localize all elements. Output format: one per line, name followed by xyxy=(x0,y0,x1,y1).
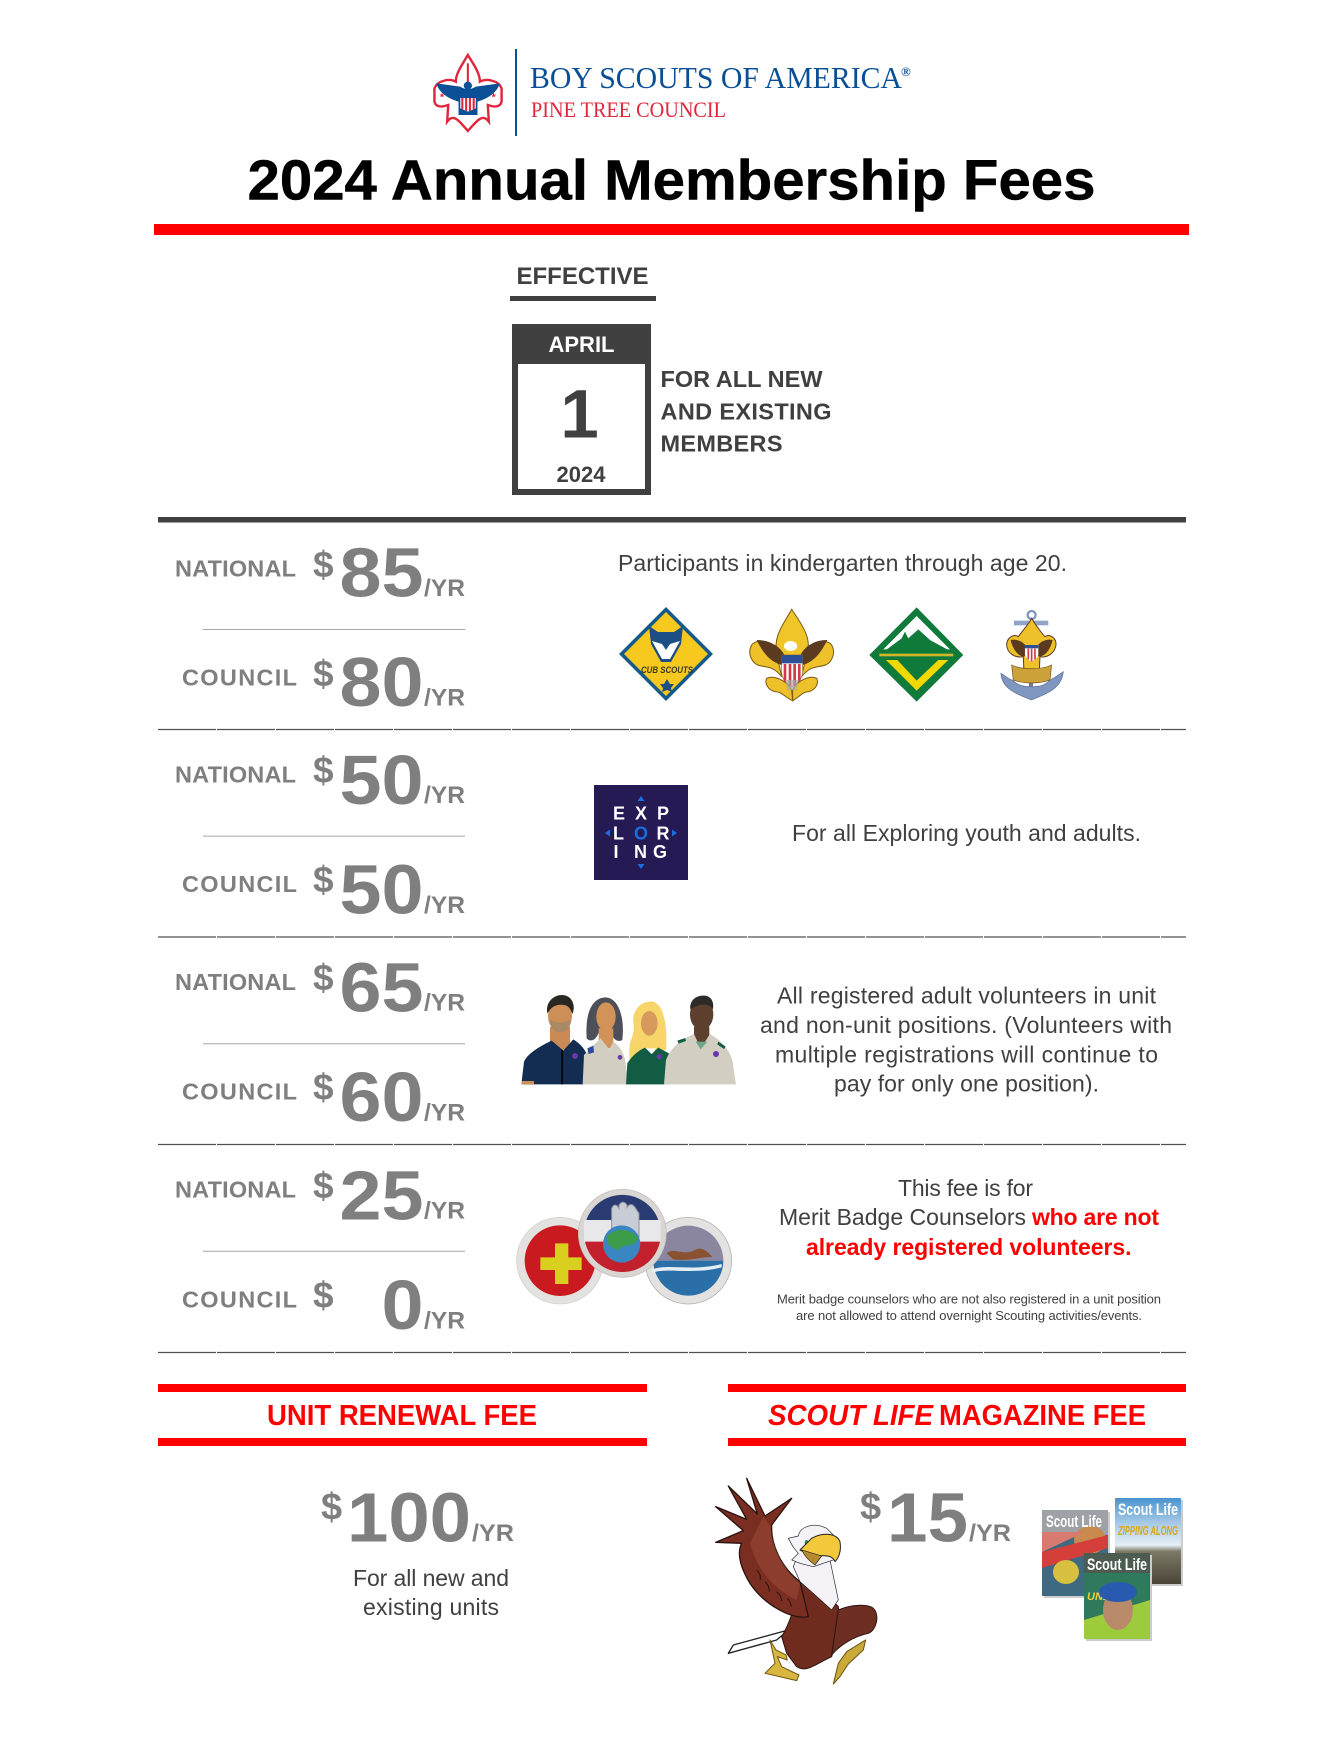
row 1 description: Participants in kindergarten through age 20. xyxy=(618,550,1067,576)
registered mark: ® xyxy=(901,64,911,79)
row 4 description: are not allowed to attend overnight Scouting activities/events. xyxy=(796,1308,1142,1323)
icon: Exploring logo: E xyxy=(613,804,625,824)
applies to text: FOR ALL NEW xyxy=(660,366,823,392)
row 3 fees: national 65, council 60: NATIONAL xyxy=(175,969,296,995)
title red rule xyxy=(154,224,1189,235)
row 4 fees: national 25, council 0: /YR xyxy=(424,1307,465,1334)
row 2 fees: national 50, council 50 xyxy=(175,741,465,929)
row 3 fees: national 65, council 60: /YR xyxy=(424,990,465,1017)
title: 2024 Annual Membership Fees xyxy=(248,148,1096,212)
icon: Exploring logo: X xyxy=(635,804,647,824)
row 1 fees: national 85, council 80 xyxy=(175,534,465,721)
row 4 description: This fee is for xyxy=(898,1175,1033,1201)
image: three merit badges xyxy=(517,1189,732,1304)
row 3 fees: national 65, council 60: $ xyxy=(313,957,334,998)
price: $100 per year: /YR xyxy=(472,1520,514,1547)
icon: Exploring logo: N xyxy=(634,842,647,862)
unit renewal description: For all new and xyxy=(353,1565,509,1591)
row 3 fees: national 65, council 60: $ xyxy=(313,1067,334,1108)
icon: Sea Scouts anchor badge xyxy=(1001,611,1063,700)
price: $100 per year: 100 xyxy=(347,1478,471,1556)
row 4 fees: national 25, council 0: $ xyxy=(313,1165,334,1206)
row 3 fees: national 65, council 60: 60 xyxy=(340,1058,424,1136)
price: $15 per year: $ xyxy=(860,1486,881,1528)
row 1 fees: national 85, council 80: $ xyxy=(313,653,334,694)
row 3 description: pay for only one position). xyxy=(834,1070,1099,1096)
magazine fee heading with rules xyxy=(728,1384,1186,1446)
effective heading: EFFECTIVE xyxy=(516,263,648,290)
row 4 description: already registered volunteers. xyxy=(806,1234,1132,1260)
row 2 fees: national 50, council 50: COUNCIL xyxy=(182,871,297,897)
icon: Exploring logo: R xyxy=(656,824,670,844)
row 4 description: who are not xyxy=(1031,1204,1159,1230)
unit renewal description xyxy=(353,1565,509,1620)
price: $15 per year: 15 xyxy=(887,1478,968,1556)
row 2 fees: national 50, council 50: /YR xyxy=(424,782,465,809)
row 1 fees: national 85, council 80: 85 xyxy=(340,534,424,612)
row 2 fees: national 50, council 50: NATIONAL xyxy=(175,761,296,787)
icon: Cub Scouts badge xyxy=(619,607,713,701)
image: Scout Life magazine covers: Scout Life xyxy=(1087,1555,1147,1574)
icon: calendar April 1 2024 xyxy=(512,324,651,495)
row 3 description: All registered adult volunteers in unit xyxy=(777,982,1157,1008)
row 4 fees: national 25, council 0: COUNCIL xyxy=(182,1286,297,1312)
row 3 fees: national 65, council 60: 65 xyxy=(340,949,424,1027)
icon: Exploring logo: G xyxy=(653,842,667,862)
image: Scout Life magazine covers: Scout Life xyxy=(1046,1512,1102,1531)
row 4 fees: national 25, council 0 xyxy=(175,1156,465,1344)
row 1 fees: national 85, council 80: $ xyxy=(313,544,334,585)
icon: Exploring logo: I xyxy=(613,842,619,862)
icon: BSA fleur-de-lis emblem xyxy=(434,55,502,131)
price: $100 per year xyxy=(321,1478,514,1556)
row 3 description xyxy=(760,982,1172,1096)
icon: Scouts BSA fleur badge xyxy=(750,609,834,701)
row 1 fees: national 85, council 80: /YR xyxy=(424,684,465,712)
magazine fee heading with rules: SCOUT LIFE xyxy=(768,1400,934,1432)
illustration: four adult volunteers xyxy=(522,995,736,1084)
magazine fee heading with rules: MAGAZINE FEE xyxy=(939,1400,1146,1432)
row 4 fees: national 25, council 0: 0 xyxy=(382,1266,424,1344)
row 2 fees: national 50, council 50: 50 xyxy=(340,741,424,819)
row 3 fees: national 65, council 60: COUNCIL xyxy=(182,1079,297,1105)
council name: PINE TREE COUNCIL xyxy=(531,97,726,122)
row 4 description: Merit badge counselors who are not also registered in a unit position xyxy=(777,1292,1161,1306)
panel: unit renewal fee xyxy=(158,1384,647,1620)
row 3 description: multiple registrations will continue to xyxy=(775,1042,1158,1068)
row 4 fees: national 25, council 0: /YR xyxy=(424,1197,465,1224)
applies to text: AND EXISTING xyxy=(660,398,832,424)
row 3 fees: national 65, council 60: /YR xyxy=(424,1100,465,1127)
unit renewal description: existing units xyxy=(363,1594,499,1620)
icon: Exploring logo: P xyxy=(657,804,669,824)
row separator xyxy=(158,1144,1186,1146)
icon: calendar April 1 2024: APRIL xyxy=(548,332,614,357)
row separator xyxy=(158,728,1186,730)
illustration: waving eagle mascot xyxy=(716,1478,877,1684)
row 4 fees: national 25, council 0: NATIONAL xyxy=(175,1176,296,1202)
row 2 description: For all Exploring youth and adults. xyxy=(792,820,1141,846)
row separator xyxy=(158,936,1186,938)
row 4 description xyxy=(777,1175,1161,1323)
applies to text: MEMBERS xyxy=(660,430,782,456)
row 2 fees: national 50, council 50: 50 xyxy=(340,851,424,929)
icon: Exploring logo: L xyxy=(613,824,624,844)
image: Scout Life magazine covers: Scout Life xyxy=(1118,1500,1178,1519)
effective date block xyxy=(510,263,832,495)
row 2 fees: national 50, council 50: $ xyxy=(313,859,334,900)
icon: Venturing badge xyxy=(869,607,963,702)
organisation name: BOY SCOUTS OF AMERICA xyxy=(530,60,903,95)
header logo: Boy Scouts of America, Pine Tree Council xyxy=(434,49,911,136)
row 2 fees: national 50, council 50: $ xyxy=(313,750,334,791)
row 1 fees: national 85, council 80: 80 xyxy=(340,643,424,721)
row 4 fees: national 25, council 0: $ xyxy=(313,1274,334,1315)
icon: Cub Scouts badge: CUB SCOUTS xyxy=(641,665,694,676)
icon: Exploring logo xyxy=(594,785,688,880)
row 3 description: and non-unit positions. (Volunteers with xyxy=(760,1012,1172,1038)
price: $15 per year: /YR xyxy=(969,1520,1011,1547)
image: Scout Life magazine covers xyxy=(1042,1498,1183,1641)
row 3 fees: national 65, council 60 xyxy=(175,949,465,1136)
vertical divider in logo xyxy=(515,49,517,136)
unit renewal heading with rules: UNIT RENEWAL FEE xyxy=(267,1400,537,1432)
price: $100 per year: $ xyxy=(321,1486,342,1528)
image: Scout Life magazine covers: UNDER xyxy=(1087,1591,1126,1603)
price: $15 per year xyxy=(860,1478,1011,1556)
row 4 fees: national 25, council 0: 25 xyxy=(340,1156,424,1234)
row 2 fees: national 50, council 50: /YR xyxy=(424,892,465,919)
unit renewal heading with rules xyxy=(158,1384,647,1446)
image: Scout Life magazine covers: ZIPPING ALONG xyxy=(1117,1523,1178,1538)
effective underline xyxy=(510,296,656,301)
applies to text xyxy=(660,366,832,456)
row 1 fees: national 85, council 80: NATIONAL xyxy=(175,556,296,582)
heavy divider xyxy=(158,517,1186,522)
icon: calendar April 1 2024: 1 xyxy=(560,376,599,452)
panel: Scout Life magazine fee xyxy=(716,1384,1186,1684)
row 1 fees: national 85, council 80: COUNCIL xyxy=(182,665,297,691)
icon: Exploring logo: O xyxy=(634,824,648,844)
icon: calendar April 1 2024: 2024 xyxy=(557,462,606,487)
row 1 fees: national 85, council 80: /YR xyxy=(424,575,465,602)
row 4 description: Merit Badge Counselors xyxy=(779,1204,1026,1230)
row separator xyxy=(158,1352,1186,1354)
